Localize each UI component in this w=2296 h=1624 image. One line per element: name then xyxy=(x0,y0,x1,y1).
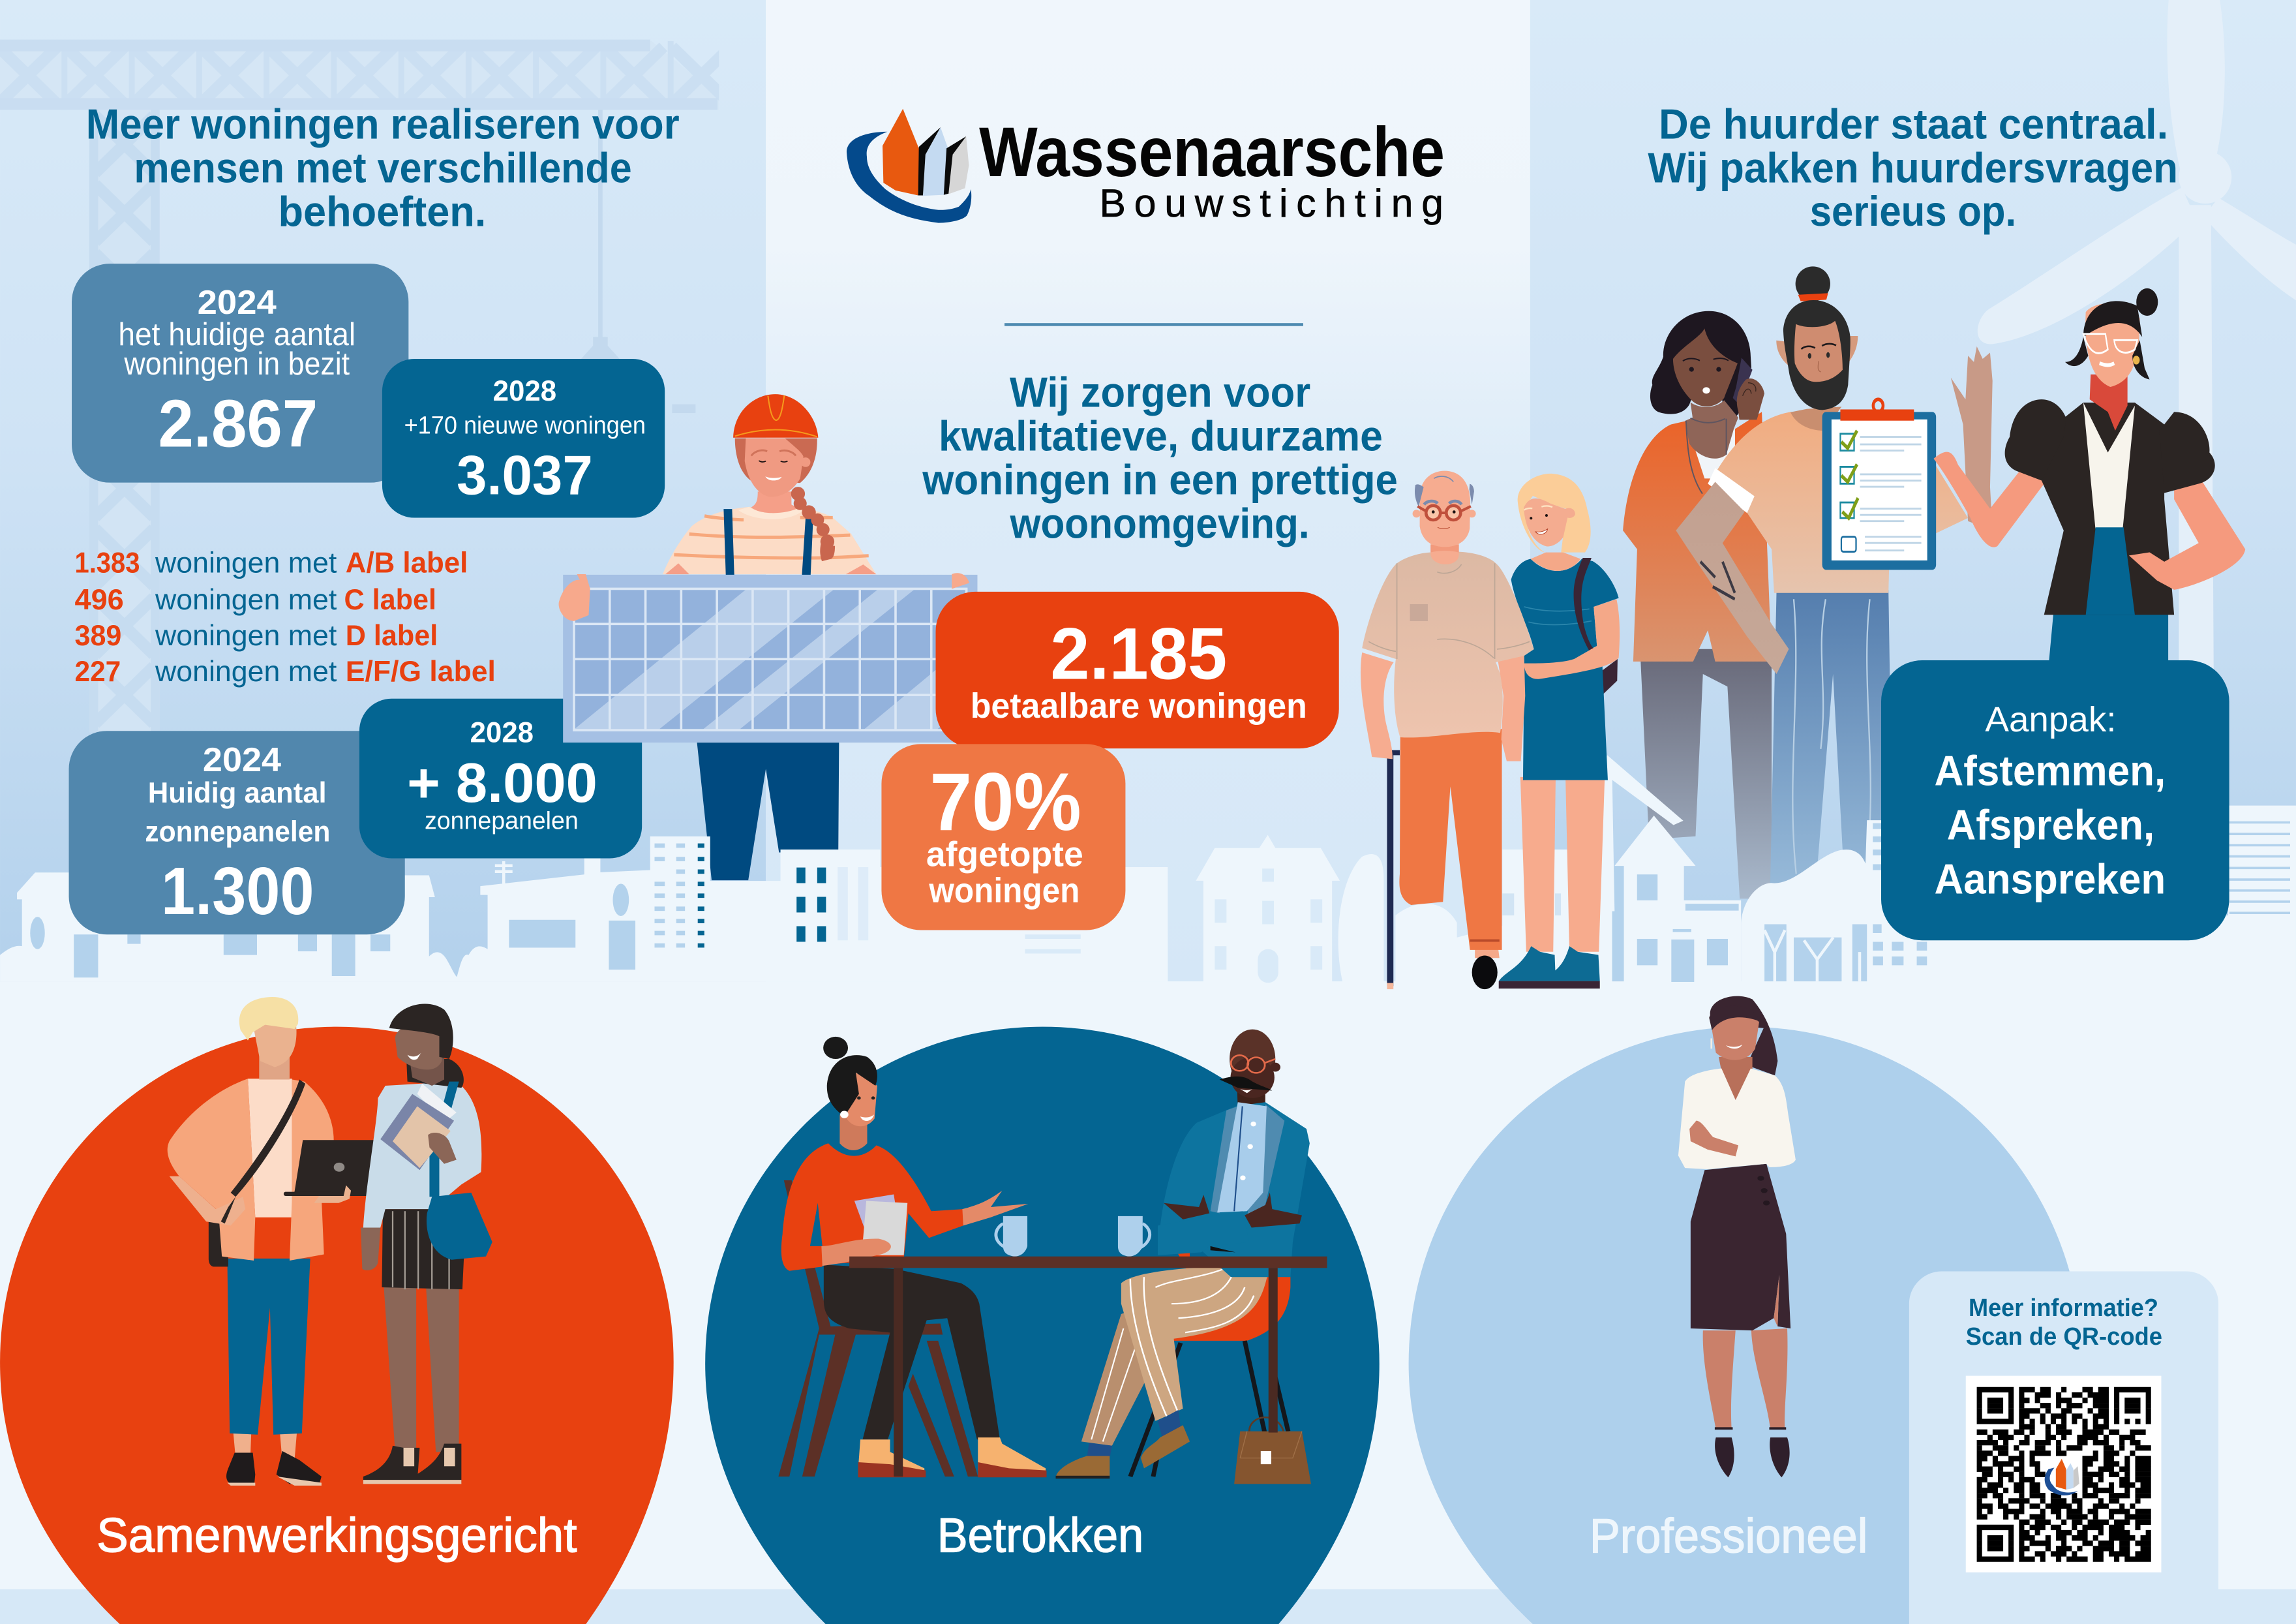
panel: box 2028 zonnepanelen xyxy=(359,699,642,858)
QR code xyxy=(1977,1390,2151,1559)
list: energy labels: woningen met xyxy=(155,619,337,652)
list: energy labels: 496 xyxy=(75,583,124,616)
number: current panels: 1.300 xyxy=(161,853,314,928)
people: woman and man at table xyxy=(778,1030,1327,1484)
heading: kwaliteit: woonomgeving. xyxy=(1010,500,1310,547)
number: percentage: 70% xyxy=(930,756,1081,848)
text: aanpak steps: Aanspreken xyxy=(1934,855,2166,902)
chair right xyxy=(1171,1246,1290,1341)
skyline: centre house and tree xyxy=(1196,835,1612,983)
people: student woman with books xyxy=(361,1004,492,1484)
skyline: right houses, trees and building xyxy=(1612,806,2296,983)
heading: meer woningen: Meer woningen realiseren voor xyxy=(86,100,680,147)
panel: box 2028 woningen xyxy=(382,359,665,518)
building: dark windows xyxy=(698,844,826,947)
person: professional woman xyxy=(1678,996,1796,1477)
text: box year: 2024 xyxy=(198,283,277,321)
list: energy labels: C label xyxy=(344,583,436,616)
jacket xyxy=(1158,1102,1310,1277)
list: energy labels: 1.383 xyxy=(75,546,140,579)
list: energy labels: E/F/G label xyxy=(346,654,496,688)
text: current homes caption xyxy=(118,316,355,382)
panel: afgetopte woningen xyxy=(881,744,1125,930)
circle: samenwerkingsgericht xyxy=(0,1027,674,1624)
QR centre logo xyxy=(2045,1459,2079,1495)
panel: QR information xyxy=(1909,1272,2218,1624)
text: betrokken: Betrokken xyxy=(937,1508,1143,1562)
background: bottom band xyxy=(0,1589,2296,1624)
heading: meer woningen: behoeften. xyxy=(279,187,486,235)
sweater xyxy=(781,1143,963,1271)
list: energy labels xyxy=(75,546,496,688)
heading: huurder centraal: De huurder staat centraal. xyxy=(1659,100,2168,147)
heading: kwaliteit: Wij zorgen voor xyxy=(1010,369,1310,416)
skyline: windows and details xyxy=(30,822,2290,982)
thigh and front leg xyxy=(1121,1266,1267,1421)
text: solar panel label: zonnepanelen xyxy=(425,807,579,835)
text: aanpak steps xyxy=(1934,746,2166,902)
person: woman with orange jacket on phone xyxy=(1623,311,1772,898)
arm xyxy=(962,1191,1028,1225)
list: energy labels: woningen met xyxy=(155,654,337,688)
illustration: solar panel with hands xyxy=(559,573,977,743)
logo mark xyxy=(847,109,971,223)
list: energy labels: 227 xyxy=(75,654,121,688)
logo wordmark: Wassenaarsche xyxy=(979,112,1445,191)
panel: box 2024 zonnepanelen xyxy=(69,731,405,934)
text: meer informatie: Scan de QR-code xyxy=(1966,1323,2162,1351)
head man xyxy=(1237,1082,1265,1111)
text: affordable caption: betaalbare woningen xyxy=(971,686,1307,726)
people: student man with laptop xyxy=(168,997,383,1486)
pants xyxy=(824,1264,1000,1439)
background: right column xyxy=(1530,0,2296,981)
text: meer informatie: Meer informatie? xyxy=(1969,1294,2158,1322)
heading: huurder centraal: serieus op. xyxy=(1810,187,2016,235)
list: energy labels: D label xyxy=(346,619,438,652)
text: aanpak steps: Afstemmen, xyxy=(1934,746,2166,794)
heading: huurder centraal xyxy=(1648,100,2178,235)
panel: betaalbare woningen xyxy=(935,592,1339,748)
background: centre column xyxy=(766,0,1530,981)
circle: professioneel xyxy=(1409,1027,2082,1624)
papers xyxy=(854,1194,901,1242)
number: extra panels: + 8.000 xyxy=(407,752,597,814)
heading: huurder centraal: Wij pakken huurdersvragen xyxy=(1648,144,2178,191)
logo: Wassenaarsche Bouwstichting xyxy=(847,109,1445,225)
background illustration: wind turbine xyxy=(1978,0,2296,732)
text: capped homes caption: afgetopte xyxy=(926,835,1083,874)
text: current homes caption: het huidige aantal xyxy=(118,316,355,352)
circle: betrokken xyxy=(705,1027,1380,1624)
number: current homes: 2.867 xyxy=(158,386,318,461)
text: solar panel caption xyxy=(145,776,330,848)
text: solar panel caption: Huidig aantal xyxy=(148,776,327,809)
heading: meer woningen xyxy=(86,100,680,235)
background: left column xyxy=(0,0,766,981)
logo sub-wordmark: Bouwstichting xyxy=(1099,181,1443,225)
panel: aanpak xyxy=(1881,660,2229,940)
person: construction worker holding solar panel xyxy=(663,394,876,880)
text: solar panel caption: zonnepanelen xyxy=(145,815,330,848)
heading: kwaliteit: kwalitatieve, duurzame xyxy=(939,412,1383,460)
shoes xyxy=(858,1437,1046,1471)
person: woman with glasses and black jacket xyxy=(1933,288,2245,662)
heading: meer woningen: mensen met verschillende xyxy=(134,144,632,191)
panel: box 2024 woningen xyxy=(72,264,408,483)
list: energy labels: 389 xyxy=(75,619,121,652)
text: current homes caption: woningen in bezit xyxy=(123,346,350,382)
skyline: left and centre white buildings xyxy=(0,836,1168,981)
number: future homes: 3.037 xyxy=(457,445,593,507)
list: energy labels: woningen met xyxy=(155,546,337,579)
text: capped homes caption: woningen xyxy=(928,871,1080,910)
text: professioneel: Professioneel xyxy=(1590,1509,1867,1563)
list: energy labels: woningen met xyxy=(155,583,337,616)
heading: kwaliteit xyxy=(922,369,1398,547)
text: samenwerkingsgericht: Samenwerkingsgericht xyxy=(97,1508,577,1562)
text: year: 2028 xyxy=(493,374,556,407)
shoes and socks xyxy=(1087,1410,1181,1458)
chair left xyxy=(778,1180,978,1477)
person: man with bun holding clipboard xyxy=(1676,266,1993,898)
background illustration: construction crane xyxy=(0,41,719,732)
bag xyxy=(1249,1417,1284,1432)
person: blonde woman with backpack xyxy=(1499,474,1620,988)
person: elderly man with cane xyxy=(1361,471,1534,989)
text: year: 2028 xyxy=(470,715,534,748)
text: capped homes caption xyxy=(926,835,1083,910)
text: year: 2024 xyxy=(203,741,281,778)
heading: kwaliteit: woningen in een prettige xyxy=(922,456,1398,504)
list: energy labels: A/B label xyxy=(346,546,468,579)
number: affordable homes: 2.185 xyxy=(1050,613,1227,695)
text: aanpak heading: Aanpak: xyxy=(1985,700,2117,739)
text: aanpak steps: Afspreken, xyxy=(1947,801,2154,848)
table xyxy=(894,1268,903,1477)
mugs xyxy=(1003,1216,1027,1257)
head xyxy=(839,1114,867,1150)
text: meer informatie xyxy=(1966,1294,2162,1351)
skyline: white details, trees and antenna xyxy=(495,861,1860,981)
small wind turbine near the woman xyxy=(1600,755,1684,912)
back leg xyxy=(1081,1308,1155,1446)
text: new homes caption: +170 nieuwe woningen xyxy=(404,411,646,439)
skyline: pale windows in centre xyxy=(838,867,1322,983)
